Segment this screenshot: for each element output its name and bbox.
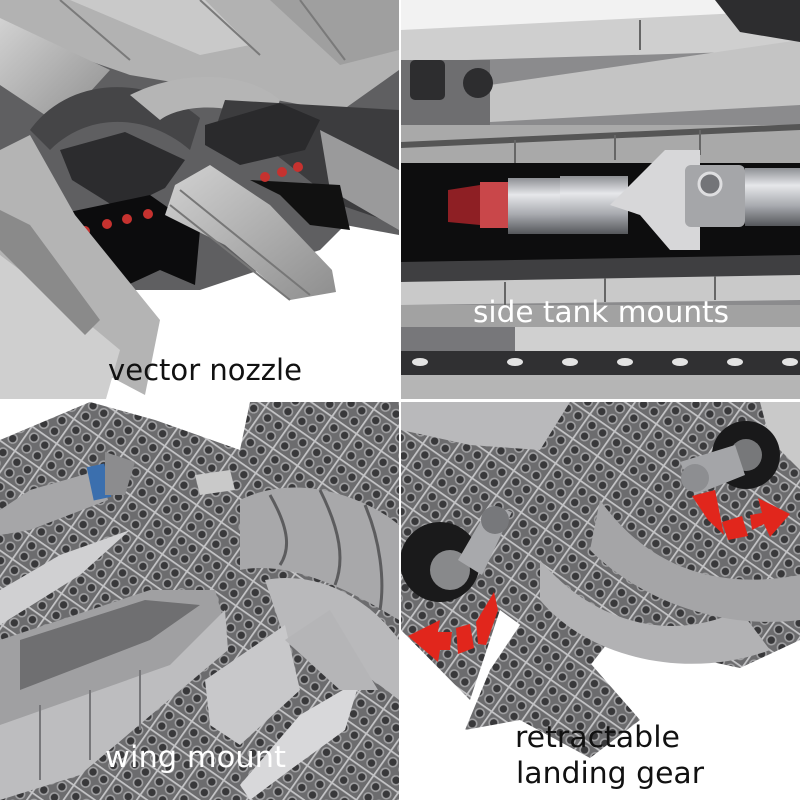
missile middle	[0, 530, 130, 625]
panel: wing mount	[0, 402, 399, 800]
tail fin	[165, 165, 336, 300]
shadowed base under nozzle	[0, 60, 399, 290]
curved exhaust arcs	[30, 77, 399, 230]
nozzle red lights	[80, 162, 303, 236]
panel: retractable landing gear	[400, 402, 800, 800]
top strips	[401, 0, 800, 165]
wing missile	[240, 690, 357, 800]
label: retractable landing gear: landing gear	[516, 756, 704, 790]
missile top	[0, 452, 135, 535]
wing panel	[205, 625, 300, 745]
rivets	[412, 358, 798, 366]
lower stripes	[401, 255, 800, 399]
wheel right	[680, 421, 780, 495]
dark nozzle plates	[55, 103, 350, 300]
top wing	[401, 402, 570, 450]
panel: side tank mounts	[401, 0, 800, 399]
curved panels	[540, 500, 800, 664]
label: side tank mounts: side tank mounts	[473, 295, 729, 329]
curved fuselage panels	[195, 470, 399, 700]
label: vector nozzle: vector nozzle	[108, 353, 302, 387]
top dark bracket	[410, 0, 800, 100]
panel: vector nozzle	[0, 0, 399, 399]
central weapons bay	[0, 590, 228, 800]
side tank	[448, 150, 800, 250]
stud plate silhouette	[401, 402, 800, 700]
stud plate silhouette	[0, 402, 399, 800]
wheel left	[400, 505, 512, 602]
tank cavity	[401, 163, 800, 263]
label: retractable landing gear	[515, 720, 704, 790]
upper wing surface	[0, 0, 399, 125]
arrow: right gear rotation	[692, 490, 790, 540]
label: retractable landing gear: retractable	[515, 720, 680, 754]
label: wing mount: wing mount	[105, 740, 286, 774]
left wing edge	[0, 135, 160, 399]
arrow: left gear rotation	[408, 592, 498, 662]
